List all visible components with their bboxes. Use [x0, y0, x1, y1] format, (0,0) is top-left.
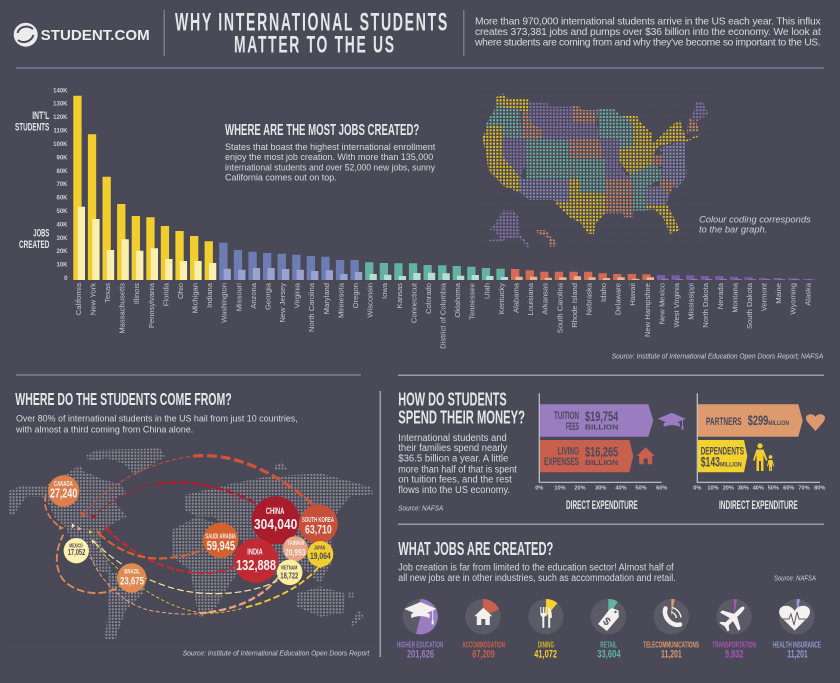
source: spending: Source: NAFSA	[398, 503, 443, 512]
icon: heart	[806, 414, 825, 431]
bubble: Vietnam: VIETNAM	[281, 565, 298, 571]
text: origins paragraph	[15, 414, 298, 435]
state labels: Pennsylvania	[147, 282, 156, 328]
job: retail: $	[600, 615, 613, 628]
axis title: int'l students	[15, 110, 49, 133]
bar: living expenses: LIVING	[558, 445, 579, 457]
state labels: Nevada	[716, 282, 725, 309]
text: jobs paragraph: California comes out on top.	[225, 172, 337, 183]
y axis labels: 70K	[56, 182, 68, 188]
bubble: Mexico: MEXICO	[69, 543, 83, 549]
state labels: New Mexico	[657, 283, 666, 324]
job: health insurance	[773, 599, 821, 660]
text: origins paragraph: Over 80% of international students in the US hail from just 10 countries,	[16, 414, 298, 425]
job: accommodation: 67,209	[472, 648, 495, 660]
state labels: Idaho	[599, 283, 608, 302]
axis labels: indirect	[693, 485, 825, 491]
state labels: Delaware	[614, 283, 623, 315]
state labels: North Carolina	[307, 282, 316, 332]
heading: what jobs are created: WHAT JOBS ARE CREATED?	[398, 538, 553, 559]
intro text: where students are coming from and why they’ve become so important to the US.	[474, 37, 821, 48]
state labels: Florida	[161, 282, 170, 306]
job: telecommunications: 11,201	[661, 648, 682, 660]
state labels: Oregon	[351, 283, 360, 308]
state labels: Indiana	[205, 282, 214, 308]
bar: partners: $299	[748, 412, 768, 428]
axis title: jobs created: CREATED	[19, 239, 49, 251]
state labels: Washington	[220, 283, 229, 323]
state labels: Georgia	[264, 282, 272, 310]
bar: tuition fees	[540, 404, 653, 437]
bar: tuition fees: FEES	[566, 421, 579, 433]
state labels: New York	[88, 283, 97, 315]
text: jobs paragraph	[225, 142, 436, 183]
state labels: North Dakota	[701, 282, 710, 328]
bar: partners: MILLION	[768, 421, 789, 427]
bubble: Brazil: BRAZIL	[124, 568, 140, 575]
bubble: Saudi Arabia: 59,945	[207, 538, 235, 553]
axis labels: direct: 10%	[554, 485, 566, 491]
state labels: South Dakota	[745, 282, 754, 329]
header	[14, 9, 822, 58]
bubble: Saudi Arabia: SAUDI ARABIA	[205, 533, 236, 540]
state labels: Illinois	[132, 283, 141, 304]
job: transportation	[712, 598, 756, 660]
state labels: Nebraska	[584, 282, 594, 316]
y axis labels: 0	[64, 276, 68, 282]
job: telecommunications	[643, 599, 699, 660]
job: transportation: 9,932	[725, 648, 743, 660]
axis title: jobs created	[19, 227, 49, 251]
state labels: Wisconsin	[366, 283, 375, 318]
state labels: Virginia	[293, 282, 302, 308]
bars: second tier states, blue	[219, 243, 362, 280]
state labels: Kentucky	[497, 283, 506, 314]
icon: parent and child	[753, 443, 774, 471]
bubble: Canada: 27,240	[50, 487, 77, 501]
axis labels: direct: 60%	[656, 485, 667, 491]
state labels: Maine	[774, 283, 783, 304]
bubble: India	[234, 538, 278, 583]
bubble: South Korea: 63,710	[305, 522, 332, 536]
state labels: Louisiana	[526, 282, 535, 316]
axis labels: indirect: 60%	[783, 485, 794, 491]
heading: where do the students come from: WHERE DO THE STUDENTS COME FROM?	[15, 389, 232, 409]
bubble: South Korea: SOUTH KOREA	[302, 517, 334, 524]
note: colour coding: Colour coding corresponds	[699, 214, 811, 225]
map: Alaska and Hawaii	[488, 211, 557, 249]
bubble: South Korea	[299, 504, 338, 544]
job: dining: DINING	[538, 639, 554, 649]
state labels: Connecticut	[409, 282, 418, 323]
axis labels: indirect: 70%	[798, 485, 810, 491]
text: jobs created paragraph: Job creation is far from limited to the education sector! Almost half of	[398, 563, 674, 574]
bubble: Canada	[48, 475, 79, 507]
title	[175, 9, 449, 58]
bubble: India: INDIA	[247, 547, 263, 556]
bubble: Japan	[307, 541, 333, 568]
bubble: Japan: 19,064	[310, 551, 331, 561]
state labels: Massachusetts	[118, 283, 127, 334]
heading: how do students spend their money	[398, 389, 525, 428]
state labels: South Carolina	[555, 282, 564, 333]
bars: top ten states, yellow	[73, 96, 216, 280]
chart: indirect expenditure	[693, 393, 825, 512]
state labels: Missouri	[234, 283, 243, 311]
intro text	[474, 16, 822, 48]
note: colour coding	[699, 214, 811, 235]
icon: graduation cap	[658, 413, 686, 430]
axis labels: indirect: 10%	[707, 485, 719, 491]
text: spending paragraph: their families spend nearly	[398, 443, 507, 454]
bar: living expenses	[540, 440, 633, 472]
bubble: Taiwan: TAIWAN	[287, 541, 304, 547]
title: MATTER TO THE US	[234, 31, 396, 58]
state labels: Maryland	[322, 283, 331, 314]
state labels: Michigan	[190, 283, 200, 313]
bars: fourth tier states, red	[511, 269, 654, 280]
intro text: creates 373,381 jobs and pumps over $36 billion into the economy. We look at	[475, 27, 821, 38]
state labels: Utah	[482, 283, 491, 299]
source: world map: Source: Institute of International Education Open Doors Report	[183, 649, 370, 658]
bubble: India: 132,888	[236, 557, 276, 574]
bar: tuition fees: $19,754	[585, 408, 618, 424]
text: spending paragraph: more than half of that is spent	[398, 464, 517, 475]
y axis labels: 50K	[56, 209, 68, 215]
job: accommodation	[462, 599, 505, 660]
source: job types: Source: NAFSA	[774, 574, 816, 583]
y axis labels: 10K	[56, 263, 68, 269]
state labels: Wyoming	[789, 283, 798, 315]
state labels: West Virginia	[672, 282, 681, 327]
state labels	[74, 282, 812, 349]
y axis labels: 130K	[53, 102, 68, 108]
text: jobs created paragraph: all new jobs are in other industries, such as accommodation and retail.	[398, 573, 676, 584]
flow arcs	[45, 456, 318, 614]
state labels: Arkansas	[541, 283, 550, 315]
text: spending paragraph	[398, 433, 517, 496]
state labels: Hawaii	[628, 283, 637, 306]
logo: student.com	[14, 23, 150, 47]
job: higher education: 201,626	[407, 648, 434, 660]
y axis labels: 90K	[56, 155, 68, 161]
bubble: China: CHINA	[266, 506, 285, 516]
state labels: District of Columbia	[439, 282, 448, 349]
state labels: Minnesota	[336, 282, 345, 318]
chart: direct expenditure	[535, 393, 686, 512]
state labels: Colorado	[424, 283, 433, 314]
axis labels: direct: 40%	[615, 485, 627, 491]
bubble: Canada: CANADA	[54, 481, 73, 488]
y axis labels: 20K	[56, 249, 68, 255]
text: spending paragraph: flows into the US economy.	[398, 485, 510, 496]
job: dining	[528, 599, 564, 660]
bar: dependents	[698, 440, 747, 472]
bar: partners: PARTNERS	[706, 416, 742, 428]
axis labels: indirect: 30%	[738, 485, 749, 491]
state labels: Arizona	[249, 282, 258, 309]
label: direct expenditure: DIRECT EXPENDITURE	[566, 498, 638, 512]
bar: dependents: $143	[701, 454, 720, 470]
text: spending paragraph: $36.5 billion a year. A little	[398, 454, 509, 465]
state labels: New Jersey	[278, 283, 287, 323]
job: higher education	[397, 599, 443, 660]
bubble: Saudi Arabia	[203, 523, 238, 558]
y axis labels	[53, 88, 68, 282]
world map with flows	[5, 447, 378, 645]
icon: house	[637, 447, 655, 464]
bar: dependents: DEPENDENTS	[701, 445, 744, 457]
text: origins paragraph: with almost a third coming from China alone.	[15, 424, 193, 435]
y axis labels: 40K	[56, 222, 68, 228]
bar: tuition fees: TUITION	[554, 410, 579, 422]
bars: fifth tier states, purple	[657, 275, 814, 280]
intro text: More than 970,000 international students arrive in the US each year. This influx	[475, 16, 822, 27]
heading: where are the most jobs created: WHERE ARE THE MOST JOBS CREATED?	[225, 122, 419, 139]
heading: how do students spend their money: SPEND THEIR MONEY?	[398, 407, 525, 428]
bubble: Vietnam	[277, 560, 303, 585]
state labels: Alaska	[803, 282, 812, 306]
bar: partners	[698, 404, 803, 437]
job: health insurance: 11,201	[787, 648, 808, 660]
bubble: Taiwan: 20,993	[285, 548, 306, 559]
job: higher education: HIGHER EDUCATION	[397, 639, 443, 649]
axis labels: indirect: 80%	[814, 485, 825, 491]
bubble: China: 304,040	[254, 516, 297, 533]
state labels: Montana	[730, 282, 739, 313]
axis title: int'l students: INT’L	[32, 110, 49, 122]
bubble: China	[252, 496, 300, 544]
logo: student.com: STUDENT.COM	[41, 27, 150, 44]
y axis labels: 80K	[56, 169, 68, 175]
title: WHY INTERNATIONAL STUDENTS	[175, 9, 449, 37]
y axis labels: 110K	[53, 128, 68, 134]
axis labels: direct: 50%	[635, 485, 647, 491]
job: telecommunications: TELECOMMUNICATIONS	[643, 639, 699, 649]
y axis labels: 100K	[53, 142, 68, 148]
job: retail	[591, 599, 626, 660]
y axis labels: 140K	[53, 88, 68, 94]
state labels: Oklahoma	[453, 282, 462, 318]
state labels: Iowa	[380, 282, 389, 299]
text: jobs created paragraph	[398, 563, 676, 584]
state labels: Kansas	[395, 283, 404, 308]
dot map: world	[5, 447, 378, 645]
text: jobs paragraph: States that boast the highest international enrollment	[225, 142, 436, 153]
dot map: United States	[475, 88, 715, 254]
state labels: Ohio	[176, 283, 185, 299]
note: colour coding: to the bar graph.	[699, 224, 767, 235]
bar: tuition fees: BILLION	[585, 422, 618, 431]
state labels: Alabama	[512, 282, 520, 313]
state labels: New Hampshire	[643, 283, 652, 337]
bubble: Japan: JAPAN	[314, 545, 325, 551]
bars: third tier states, teal	[365, 262, 508, 280]
axis labels: direct	[535, 485, 667, 491]
y axis labels: 120K	[53, 115, 68, 121]
job: dining: 41,072	[534, 648, 557, 660]
bubble: Vietnam: 18,722	[280, 570, 298, 580]
bubble: Mexico	[64, 538, 89, 563]
axis labels: direct: 0%	[535, 485, 543, 491]
bar: living expenses: BILLION	[585, 458, 618, 467]
text: jobs paragraph: international students and over 52,000 new jobs, sunny	[225, 162, 435, 173]
job: accommodation: ACCOMMODATION	[462, 639, 505, 649]
axis labels: indirect: 20%	[723, 485, 734, 491]
axis labels: indirect: 50%	[768, 485, 779, 491]
state labels: Vermont	[760, 282, 768, 311]
axis title: int'l students: STUDENTS	[15, 121, 49, 133]
axis title: jobs created: JOBS	[33, 227, 49, 239]
axis labels: direct: 30%	[595, 485, 606, 491]
job: retail: RETAIL	[600, 639, 617, 649]
text: spending paragraph: on tuition fees, and the rest	[398, 475, 512, 486]
bar: living expenses: $16,265	[585, 444, 618, 460]
heading: how do students spend their money: HOW DO STUDENTS	[398, 389, 507, 410]
bar: dependents: MILLION	[720, 463, 742, 469]
bubble: Mexico: 17,052	[68, 548, 86, 557]
axis labels: direct: 20%	[574, 485, 586, 491]
state labels: Texas	[103, 283, 112, 303]
source: bar chart: Source: Institute of International Education Open Doors Report; NAFSA	[612, 353, 824, 360]
state labels: California	[74, 282, 83, 315]
y axis labels: 30K	[56, 236, 68, 242]
bubble: Taiwan	[283, 536, 308, 561]
state labels: Tennessee	[468, 283, 477, 320]
bubble: Brazil: 23,675	[120, 575, 144, 587]
axis labels: indirect: 0%	[693, 485, 701, 491]
text: spending paragraph: International students and	[398, 433, 507, 444]
job: retail: 33,604	[597, 648, 621, 660]
bubble: Brazil	[117, 563, 146, 593]
bar: living expenses: EXPENSES	[544, 456, 579, 468]
job: transportation: TRANSPORTATION	[712, 639, 756, 649]
state labels: Rhode Island	[570, 283, 579, 328]
y axis labels: 60K	[56, 196, 68, 202]
text: jobs paragraph: enjoy the most job creation. With more than 135,000	[225, 152, 433, 163]
axis labels: indirect: 40%	[753, 485, 764, 491]
state labels: Mississippi	[687, 283, 696, 320]
bar chart: students and jobs by state	[15, 88, 814, 349]
